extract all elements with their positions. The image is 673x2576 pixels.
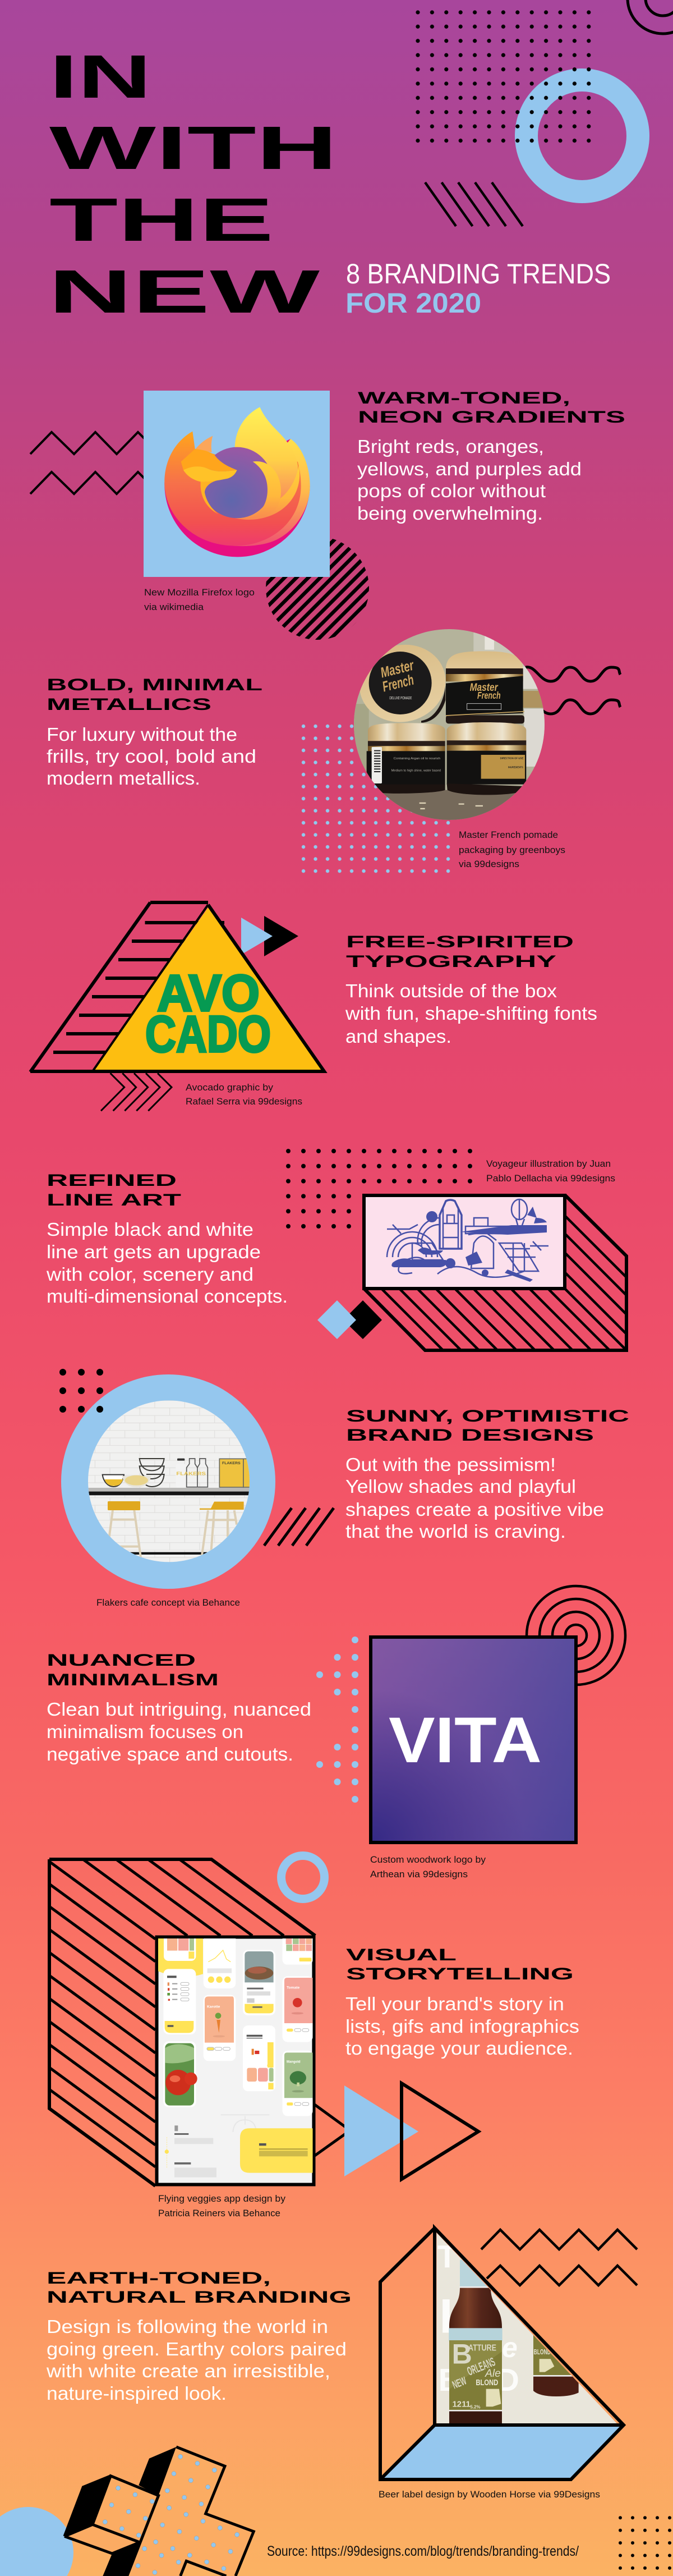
body text: visual: [345, 1993, 579, 2059]
body text: earth-toned: [46, 2316, 347, 2404]
body text: earth-toned: with white create an irresistible,: [46, 2360, 330, 2381]
decoration: blue ring: [282, 1855, 324, 1899]
image: Beer label bottles: ORLEANS: [465, 2354, 497, 2378]
body text: sunny: Yellow shades and playful: [345, 1476, 576, 1497]
decoration: black dot grid: [280, 1144, 478, 1234]
body text: metallics: modern metallics.: [47, 768, 200, 789]
body text: visual: lists, gifs and infographics: [345, 2016, 579, 2037]
body text: metallics: For luxury without the: [47, 724, 237, 745]
body text: earth-toned: going green. Earthy colors paired: [47, 2339, 347, 2359]
caption: pomade: [459, 829, 565, 869]
image: Flying veggies app screens: [157, 1932, 314, 2184]
body text: nuanced: minimalism focuses on: [47, 1721, 243, 1742]
image: Beer label bottles: B: [439, 2363, 462, 2398]
jar: bottom left: Containing Argan oil to nourish: [394, 757, 440, 760]
heading: warm-toned, neon gradients: NEON GRADIENTS: [358, 408, 625, 427]
image: Beer label bottles: [435, 2228, 625, 2424]
image: Beer label bottles: BLOND: [476, 2378, 498, 2387]
caption: firefox: via wikimedia: [144, 602, 204, 612]
jar: lying lid: Master: [379, 657, 416, 681]
panel: earth-toned natural branding: [46, 2228, 637, 2500]
caption: voyageur: Voyageur illustration by Juan: [486, 1158, 611, 1169]
decoration: diagonal lines: [264, 1508, 334, 1546]
caption: avocado: Avocado graphic by: [186, 1082, 274, 1093]
body text: sunny: [345, 1454, 604, 1542]
heading: visual storytelling: STORYTELLING: [346, 1965, 574, 1983]
decoration: blue dot grid: [297, 720, 454, 877]
jar: bottom left: [367, 723, 445, 794]
caption: pomade: via 99designs: [459, 859, 519, 869]
heading: free-spirited typography: TYPOGRAPHY: [346, 952, 556, 971]
decoration: blue circle: [0, 2507, 73, 2576]
image: Beer label bottles: ATTURE: [468, 2343, 496, 2353]
panel: refined line art: [46, 1144, 626, 1350]
heading: nuanced minimalism: [47, 1651, 219, 1689]
body text: metallics: frills, try cool, bold and: [47, 746, 256, 767]
decoration: black dot grid: [411, 5, 596, 148]
image: Beer label bottles: L: [439, 2290, 469, 2344]
caption: vita: Arthean via 99designs: [370, 1869, 468, 1880]
heading: sunny, optimistic brand designs: BRAND DESIGNS: [346, 1426, 594, 1445]
avocado graphic: yellow triangle: CADO: [145, 1006, 271, 1063]
heading: warm-toned, neon gradients: WARM-TONED,: [358, 389, 570, 407]
heading: earth-toned, natural branding: NATURAL BRANDING: [47, 2288, 352, 2307]
body text: sunny: that the world is craving.: [345, 1521, 566, 1542]
body text: nuanced: Clean but intriguing, nuanced: [47, 1699, 311, 1720]
icon: blue diamond: [317, 1300, 356, 1339]
caption: voyageur: [486, 1158, 615, 1184]
heading: bold, minimal metallics: BOLD, MINIMAL: [47, 676, 262, 694]
title: IN WITH THE NEW: NEW: [48, 258, 320, 326]
decoration: outlined triangle behind the image: [308, 2100, 345, 2160]
caption: pomade: Master French pomade: [459, 829, 558, 840]
caption: beer label: Beer label design by Wooden Horse via 99Designs: [379, 2489, 600, 2500]
image: Beer label bottles: 12: [453, 2400, 462, 2409]
caption: vita: [370, 1854, 486, 1880]
icon: Firefox logo: [164, 407, 310, 557]
subtitle: 8 branding trends for 2020: [345, 258, 611, 319]
jar: bottom right: [447, 722, 526, 795]
title: IN WITH THE NEW: THE: [49, 186, 274, 254]
source line: Source: https://99designs.com/blog/trends/branding-trends/: [267, 2543, 579, 2559]
decoration: zigzag lines: [481, 2230, 637, 2285]
jar: top right: French: [477, 690, 501, 701]
heading: refined line art: REFINED: [47, 1171, 177, 1190]
body text: nuanced: [47, 1699, 311, 1764]
caption: veggies: Flying veggies app design by: [158, 2193, 286, 2204]
caption: flakers: Flakers cafe concept via Behance: [96, 1597, 240, 1608]
panel: sunny, optimistic brand designs: [59, 1369, 629, 1608]
body text: line art: line art gets an upgrade: [47, 1241, 261, 1262]
header: title block and decoration: [48, 0, 673, 326]
avocado graphic: yellow triangle: [30, 905, 324, 1071]
body text: nuanced: negative space and cutouts.: [47, 1744, 293, 1764]
caption: firefox: [144, 587, 255, 612]
subtitle: 8 branding trends for 2020: FOR 2020: [345, 287, 481, 319]
body text: earth-toned: Design is following the world in: [47, 2316, 328, 2337]
body text: warm-toned: [357, 436, 582, 524]
image: Flakers cafe in blue ring: FLAKERS: [222, 1462, 241, 1465]
body text: warm-toned: Bright reds, oranges,: [357, 436, 544, 457]
image: Flying veggies app screens: Tomate: [287, 1986, 299, 1990]
caption: avocado: [186, 1082, 302, 1107]
decoration: concentric circles: [527, 1586, 625, 1685]
caption: veggies: Patricia Reiners via Behance: [158, 2208, 280, 2219]
body text: typography: and shapes.: [345, 1026, 451, 1047]
title: IN WITH THE NEW: [48, 43, 338, 326]
image: Master French pomade jars in a circle: [351, 629, 545, 820]
image: blue square with Firefox logo: [144, 391, 330, 577]
heading: visual storytelling: [346, 1946, 574, 1983]
body text: typography: [345, 980, 597, 1047]
decoration: blue base of sail shape: [380, 2425, 624, 2479]
body text: visual: Tell your brand's story in: [345, 1993, 564, 2014]
heading: visual storytelling: VISUAL: [346, 1946, 457, 1964]
body text: line art: multi-dimensional concepts.: [47, 1286, 288, 1307]
panel: warm-toned neon gradients: [30, 389, 625, 640]
image: Beer label bottles: BLOND: [534, 2348, 551, 2356]
body text: warm-toned: being overwhelming.: [357, 503, 543, 524]
decoration: black dots: [59, 1369, 103, 1413]
avocado graphic: yellow triangle: AVO: [157, 965, 260, 1022]
heading: refined line art: [47, 1171, 181, 1209]
decoration: top corner arcs: [628, 0, 673, 34]
icon: outlined triangle: [402, 2083, 478, 2179]
decoration: light blue ring: [526, 80, 638, 192]
heading: earth-toned, natural branding: [47, 2269, 352, 2307]
panel: bold minimal metallics: [47, 629, 620, 877]
heading: nuanced minimalism: MINIMALISM: [47, 1671, 219, 1689]
jar: bottom left: Medium to high shine, water based: [391, 769, 441, 772]
caption: voyageur: Pablo Dellacha via 99designs: [486, 1173, 615, 1184]
title: IN WITH THE NEW: WITH: [49, 114, 338, 182]
subtitle: 8 branding trends for 2020: 8 BRANDING TRENDS: [346, 258, 611, 290]
heading: bold, minimal metallics: METALLICS: [47, 695, 211, 714]
decoration: 3D striped box: [364, 1195, 626, 1350]
decoration: wavy lines: [526, 667, 620, 714]
decoration: striped circle: [266, 537, 369, 640]
footer: decoration and source: [0, 2447, 673, 2576]
jar: lying lid: French: [381, 671, 416, 695]
jar: top right: Master: [470, 682, 499, 694]
icon: black diamond: [343, 1300, 382, 1339]
decoration: ladder behind the triangle: [30, 902, 224, 1072]
heading: sunny, optimistic brand designs: SUNNY, OPTIMISTIC: [346, 1407, 629, 1425]
body text: line art: with color, scenery and: [46, 1264, 253, 1285]
body text: sunny: shapes create a positive vibe: [345, 1499, 604, 1520]
decoration: diagonal lines: [425, 182, 523, 226]
decoration: sail shape outline: [380, 2228, 624, 2479]
heading: free-spirited typography: [346, 933, 574, 971]
image: Beer label bottles: 5.2%: [470, 2405, 481, 2410]
heading: free-spirited typography: FREE-SPIRITED: [346, 933, 574, 951]
heading: nuanced minimalism: NUANCED: [47, 1651, 196, 1670]
image: Beer label bottles: NEW: [451, 2375, 468, 2391]
heading: sunny, optimistic brand designs: [346, 1407, 629, 1445]
image: VITA logo on purple: VITA: [389, 1704, 542, 1776]
body text: line art: [46, 1219, 288, 1307]
decoration: zigzag lines: [30, 432, 151, 494]
image: Beer label bottles: 11: [462, 2400, 471, 2409]
heading: bold, minimal metallics: [47, 676, 262, 714]
jar: bottom right: DIRECTION OF USE: [500, 757, 524, 760]
panel: nuanced minimalism: [47, 1586, 625, 1880]
image: Beer label bottles: e: [502, 2332, 518, 2363]
body text: typography: Think outside of the box: [345, 980, 557, 1001]
image: Beer label bottles: B: [452, 2339, 472, 2370]
image: Beer label bottles: Ale: [485, 2368, 501, 2380]
icon: black arrow triangle: [264, 916, 298, 956]
panel: visual storytelling: [49, 1855, 579, 2219]
icon: blue triangle: [344, 2085, 418, 2176]
decoration: 3D striped cube: [49, 1859, 315, 2186]
jar: bottom right: INGREDIENTS: [508, 766, 523, 769]
heading: refined line art: LINE ART: [47, 1191, 181, 1209]
body text: metallics: [47, 724, 256, 789]
body text: sunny: Out with the pessimism!: [345, 1454, 556, 1475]
decoration: 3D cross with dots: [64, 2447, 253, 2576]
image: Flakers cafe in blue ring: FLAKERS: [176, 1470, 206, 1476]
image: Flakers cafe in blue ring: [61, 1374, 275, 1589]
body text: typography: with fun, shape-shifting fonts: [345, 1003, 597, 1024]
heading: warm-toned, neon gradients: [358, 389, 625, 427]
title: IN WITH THE NEW: IN: [49, 43, 151, 111]
panel: free-spirited typography: [30, 902, 597, 1111]
decoration: chevrons: [101, 1073, 172, 1111]
icon: blue arrow triangle: [241, 918, 273, 955]
caption: firefox: New Mozilla Firefox logo: [144, 587, 255, 598]
caption: avocado: Rafael Serra via 99designs: [186, 1096, 302, 1107]
decoration: black dot grid: [614, 2511, 673, 2574]
image: Beer label bottles: D: [496, 2363, 519, 2398]
body text: earth-toned: nature-inspired look.: [47, 2383, 227, 2404]
jar: lying lid: [360, 644, 445, 723]
caption: pomade: packaging by greenboys: [459, 845, 565, 855]
body text: line art: Simple black and white: [47, 1219, 253, 1240]
image: Flying veggies app screens: Karotte: [207, 2005, 220, 2009]
caption: vita: Custom woodwork logo by: [370, 1854, 486, 1865]
heading: earth-toned, natural branding: EARTH-TONED,: [47, 2269, 271, 2288]
image: Beer label bottles: T: [437, 2239, 457, 2275]
body text: visual: to engage your audience.: [345, 2038, 573, 2059]
image: VITA logo on purple: [371, 1637, 576, 1842]
body text: warm-toned: pops of color without: [357, 480, 546, 501]
caption: veggies: [158, 2193, 286, 2219]
image: Flying veggies app screens: Mangold: [287, 2061, 301, 2064]
jar: lying lid: DELUXE POMADE: [389, 695, 412, 700]
jar: top right: [446, 651, 524, 723]
body text: warm-toned: yellows, and purples add: [357, 459, 582, 479]
decoration: blue dots: [316, 1637, 358, 1803]
image: Voyageur line illustration: [364, 1195, 565, 1289]
